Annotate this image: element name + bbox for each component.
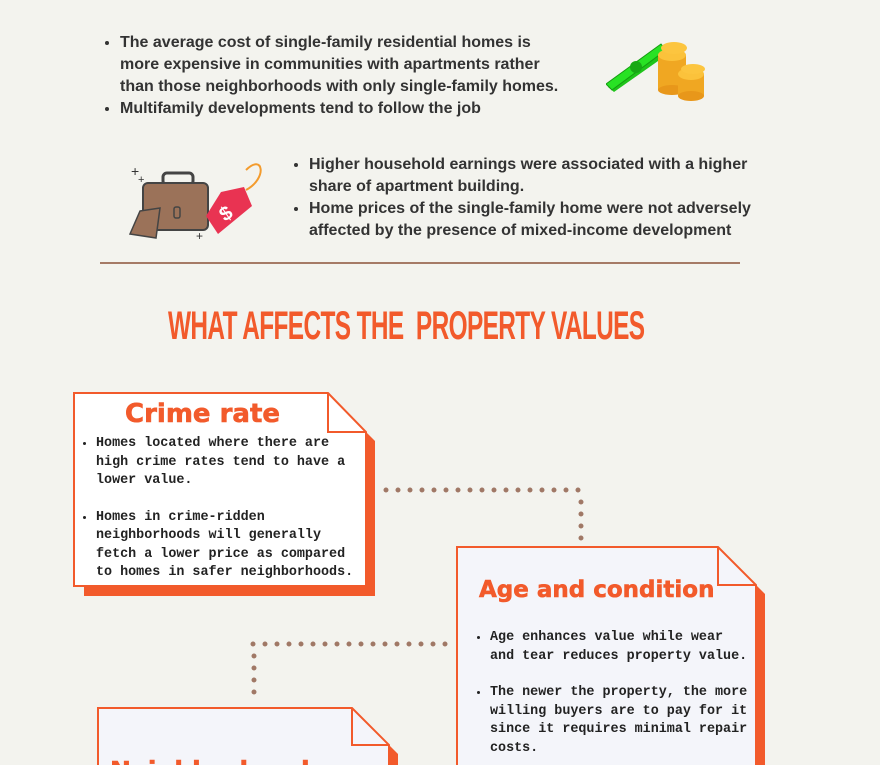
heading: crime rate: Crime rate <box>125 399 280 429</box>
card shape: age <box>457 547 765 765</box>
icon: briefcase and price tag: + <box>196 229 203 243</box>
text block: top bullets: Multifamily developments tend to follow the job <box>120 100 481 117</box>
text: age bullets: Age enhances value while wear and tear reduces property value. <box>490 630 747 664</box>
text block: top bullets: The average cost of single-family residential homes is more expensive in communities with apartments rather than those neighborhoods with only single-family homes. <box>120 34 558 95</box>
card shape: crime <box>74 393 375 596</box>
text: crime rate bullets: Homes located where there are high crime rates tend to have a lower value. <box>96 436 345 488</box>
icon: briefcase and price tag: $ <box>215 202 237 226</box>
icon: money and coins <box>606 42 705 101</box>
text block: second bullets: Home prices of the single-family home were not adversely affected by the presence of mixed-income development <box>309 200 751 239</box>
text: age bullets: The newer the property, the more willing buyers are to pay for it since it requires minimal repair costs. <box>490 685 747 756</box>
text: crime rate bullets: Homes in crime-ridden neighborhoods will generally fetch a lower price as compared to homes in safer neighborhoods. <box>96 510 353 580</box>
icon: briefcase and price tag: + <box>138 174 144 186</box>
title: WHAT AFFECTS THE PROPERTY VALUES <box>168 304 644 348</box>
text: crime rate bullets <box>83 436 353 580</box>
icon: briefcase and price tag: + <box>131 163 139 179</box>
card shape: neighborhood <box>98 708 398 765</box>
icon: briefcase and price tag <box>129 163 262 243</box>
text block: second bullets <box>294 156 751 239</box>
heading: age and condition: Age and condition <box>479 577 714 603</box>
text: age bullets <box>477 630 747 756</box>
text block: second bullets: Higher household earnings were associated with a higher share of apartment building. <box>309 156 747 195</box>
